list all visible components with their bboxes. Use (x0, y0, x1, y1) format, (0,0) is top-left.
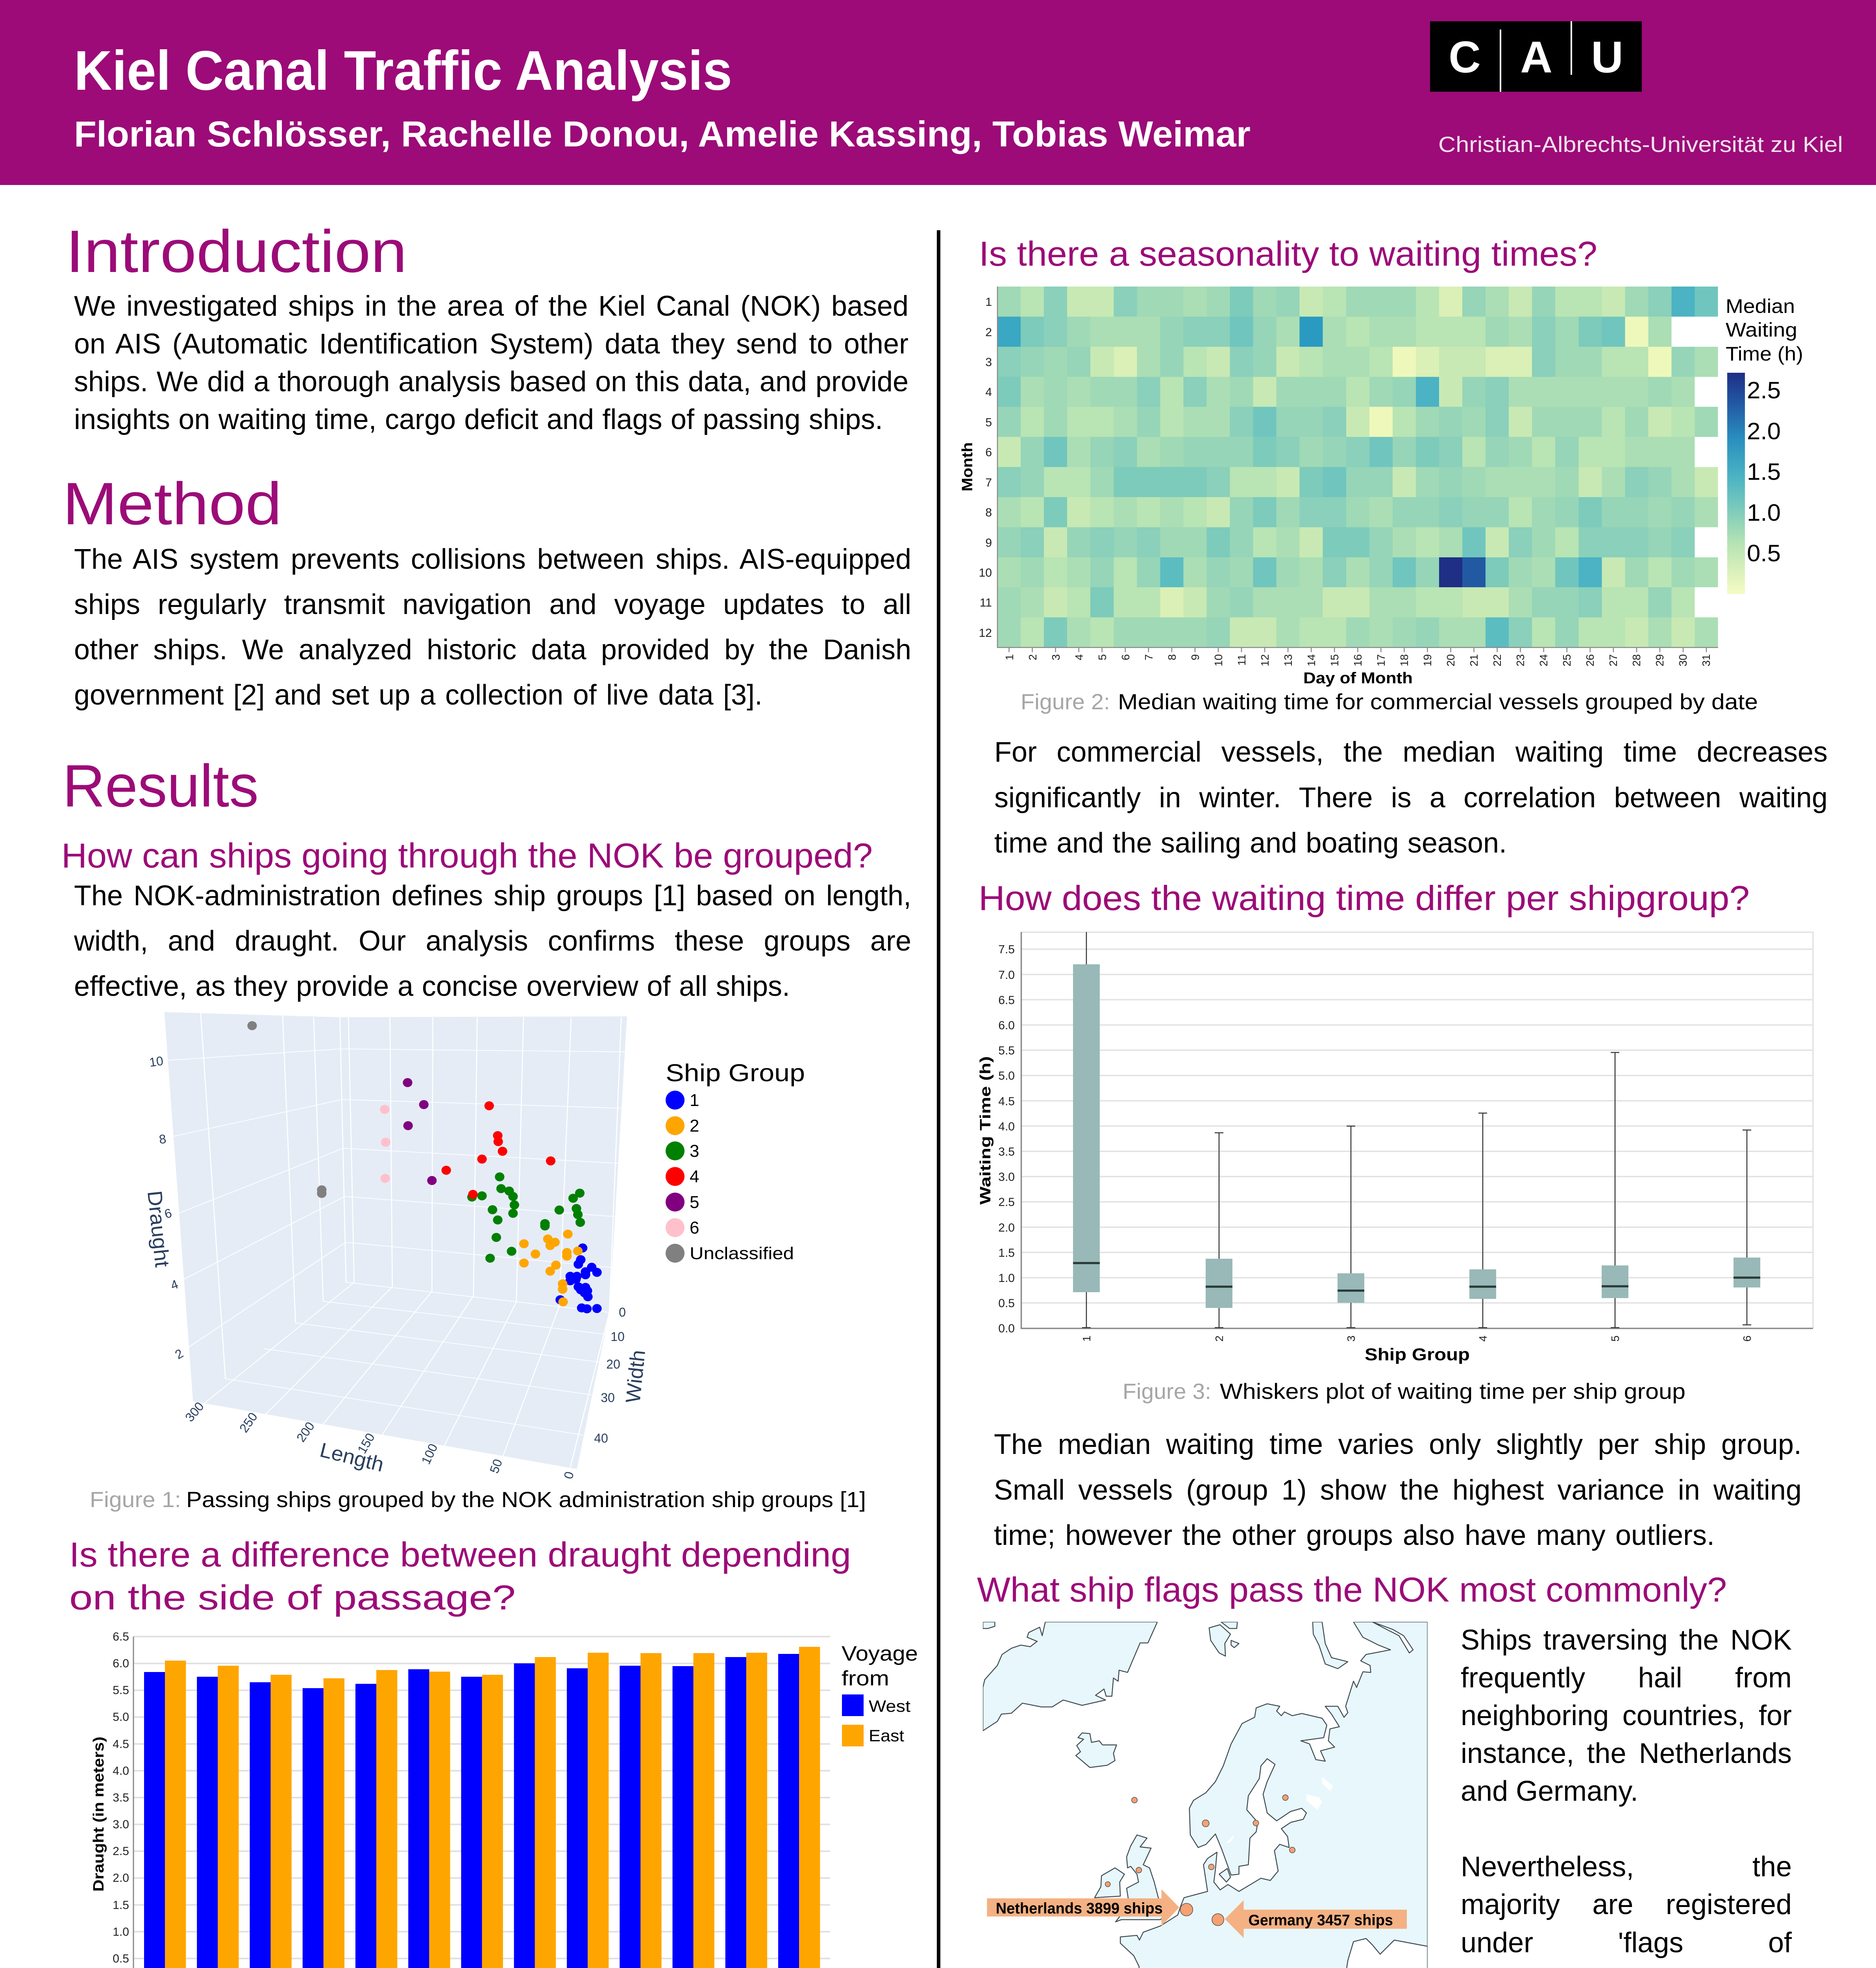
x axis labels (1080, 1335, 1753, 1342)
day labels: 6 (1119, 654, 1132, 660)
axis title: month: Month (959, 442, 976, 491)
day labels: 12 (1259, 654, 1271, 666)
chart: 3D scatter of ship groups (143, 1012, 805, 1480)
CAU logo (1430, 21, 1642, 92)
legend: ship group: Unclassified (690, 1244, 794, 1263)
land: Iceland (1076, 1733, 1117, 1768)
legend: ship group: 5 (690, 1193, 699, 1212)
land: Greenland (983, 1622, 1157, 1731)
y axis labels: 3.5 (113, 1791, 129, 1804)
heading: draught question: Is there a difference between draught depending (69, 1535, 851, 1574)
CAU logo: C (1449, 32, 1481, 82)
legend: voyage from (842, 1642, 918, 1746)
length axis: 150 (355, 1431, 377, 1456)
arrow: Netherlands: Netherlands 3899 ships (996, 1900, 1163, 1917)
y axis labels: 4.5 (998, 1095, 1015, 1108)
text: shipgroup finding (994, 1422, 1802, 1559)
month labels (979, 296, 992, 640)
legend: voyage from: West (869, 1697, 910, 1715)
text: ship grouping: The NOK-administration defines ship groups [1] based on length, (74, 880, 911, 912)
x axis labels: 3 (1345, 1335, 1357, 1342)
caption: figure 1: Passing ships grouped by the NOK administration ship groups [1] (186, 1487, 866, 1512)
month labels: 9 (985, 536, 992, 549)
day labels: 3 (1050, 654, 1062, 660)
width axis: 40 (594, 1431, 608, 1445)
caption: figure 2: Figure 2: (1021, 689, 1110, 714)
day labels (1003, 654, 1712, 666)
text: method (74, 537, 911, 718)
text: flags finding (1461, 1621, 1792, 1968)
month labels: 8 (985, 506, 992, 519)
legend: colour bar: Median (1726, 295, 1795, 317)
legend: ship group: 3 (690, 1141, 699, 1161)
y axis labels: 6.0 (113, 1657, 129, 1670)
axis title: ship group: Ship Group (1365, 1345, 1470, 1364)
heading: shipgroup question: How does the waiting time differ per shipgroup? (979, 879, 1750, 917)
points: group 2 (519, 1230, 583, 1306)
text: flags finding: instance, the Netherlands (1461, 1738, 1792, 1769)
heading: draught question (69, 1535, 851, 1617)
day labels: 26 (1584, 654, 1596, 666)
CAU logo: A (1520, 32, 1552, 82)
text: ship grouping: effective, as they provide a concise overview of all ships. (74, 971, 790, 1002)
whiskers (1082, 932, 1751, 1328)
y axis labels: 5.0 (113, 1711, 129, 1724)
month labels: 10 (979, 566, 992, 579)
draught axis (143, 1054, 186, 1362)
heading: draught question: on the side of passage? (69, 1578, 516, 1617)
y axis labels: 4.5 (113, 1738, 129, 1751)
y axis labels: 0.5 (113, 1952, 129, 1965)
axis title: draught: Draught (in meters) (91, 1737, 107, 1892)
draught axis: 6 (163, 1206, 173, 1221)
land: Sjaelland (1219, 1868, 1230, 1882)
arrow: Netherlands (987, 1889, 1179, 1926)
y axis labels: 2.0 (113, 1872, 129, 1885)
text: flags finding: frequently hail from (1461, 1662, 1792, 1694)
y axis labels: 1.0 (998, 1272, 1015, 1285)
length axis: 200 (294, 1419, 317, 1445)
land: Eurasia (1120, 1622, 1428, 1968)
y axis labels: 3.0 (998, 1171, 1015, 1184)
width axis (594, 1305, 650, 1445)
day labels: 17 (1375, 654, 1387, 666)
points: group 6 (380, 1105, 390, 1183)
text: method: ships regularly transmit navigation and voyage updates to all (74, 589, 911, 620)
caption: figure 3: Figure 3: (1123, 1379, 1211, 1404)
legend: colour bar: Time (h) (1726, 343, 1803, 365)
y axis labels: 6.5 (998, 994, 1015, 1007)
text: shipgroup finding: The median waiting time varies only slightly per ship group. (994, 1429, 1802, 1460)
text: flags finding: majority are registered (1461, 1889, 1792, 1920)
y axis labels: 1.5 (113, 1899, 129, 1912)
day labels: 21 (1468, 654, 1480, 666)
day labels: 31 (1700, 654, 1712, 666)
points: flag states (995, 1795, 1408, 1968)
caption: figure 2: Median waiting time for commercial vessels grouped by date (1118, 689, 1758, 714)
width axis: 10 (611, 1330, 625, 1344)
heading: Results: Results (63, 753, 259, 819)
CAU logo: U (1591, 32, 1623, 82)
y axis labels (998, 943, 1015, 1335)
arrow: Germany (1225, 1900, 1407, 1938)
draught axis: 10 (148, 1054, 164, 1069)
points: group 3 (467, 1173, 585, 1263)
land: Svalbard (1209, 1622, 1239, 1656)
sea: Kara sliver (1372, 1622, 1413, 1653)
heading: flags question: What ship flags pass the NOK most commonly? (977, 1570, 1727, 1609)
legend: ship group (666, 1060, 805, 1263)
day labels: 10 (1212, 654, 1225, 666)
bars: west (144, 1654, 799, 1968)
heading: Method: Method (63, 470, 282, 537)
chart: mean draught bars (91, 1630, 918, 1968)
day labels: 8 (1166, 654, 1178, 660)
text: flags finding: neighboring countries, for (1461, 1700, 1792, 1731)
text: flags finding: Ships traversing the NOK (1461, 1624, 1792, 1656)
y axis labels: 3.0 (113, 1818, 129, 1831)
text: introduction: ships. We did a thorough analysis based on this data, and provide (74, 366, 908, 398)
legend: voyage from: from (842, 1667, 889, 1690)
legend: colour bar: 0.5 (1747, 540, 1781, 566)
text: shipgroup finding: time; however the other groups also have many outliers. (994, 1520, 1715, 1551)
legend: ship group: 2 (690, 1116, 699, 1136)
chart: waiting time box plot (977, 932, 1813, 1364)
day labels: 23 (1514, 654, 1526, 666)
day labels: 4 (1073, 654, 1085, 660)
y axis labels: 0.5 (998, 1297, 1015, 1310)
day labels: 27 (1607, 654, 1619, 666)
legend: voyage from: East (869, 1726, 904, 1745)
heading: seasonality question: Is there a seasonality to waiting times? (979, 234, 1597, 273)
month labels: 3 (985, 356, 992, 369)
text: introduction: on AIS (Automatic Identification System) data they send to other (74, 328, 908, 360)
day labels: 13 (1282, 654, 1294, 666)
text: introduction: insights on waiting time, cargo deficit and flags of passing ships. (74, 404, 883, 435)
points: group 1 (555, 1243, 602, 1313)
y axis labels: 5.0 (998, 1069, 1015, 1082)
day labels: 7 (1143, 654, 1155, 660)
legend: colour bar: 1.5 (1747, 459, 1781, 485)
day labels: 22 (1491, 654, 1503, 666)
caption: figure 3: Whiskers plot of waiting time per ship group (1220, 1379, 1685, 1404)
text: ship grouping (74, 873, 911, 1009)
heading: ship grouping question: How can ships going through the NOK be grouped? (61, 836, 873, 875)
length axis (182, 1399, 577, 1480)
legend: colour bar: 1.0 (1747, 499, 1781, 526)
land: Novaya Zemlya (1313, 1622, 1348, 1668)
text: seasonality finding (994, 730, 1828, 866)
day labels: 25 (1561, 654, 1573, 666)
authors: Florian Schlösser, Rachelle Donou, Amelie Kassing, Tobias Weimar (74, 114, 1251, 154)
legend: ship group: 4 (690, 1167, 699, 1186)
text: flags finding: under 'flags of (1461, 1927, 1792, 1959)
day labels: 20 (1445, 654, 1457, 666)
day labels: 28 (1630, 654, 1643, 666)
length axis: 0 (561, 1470, 577, 1480)
width axis: Width (622, 1349, 650, 1404)
length axis: 100 (418, 1441, 440, 1467)
length axis: 300 (182, 1399, 207, 1424)
y axis labels: 2.0 (998, 1221, 1015, 1234)
title: Kiel Canal Traffic Analysis (74, 39, 732, 102)
draught axis: 8 (158, 1132, 167, 1147)
map: flags across Europe (983, 1622, 1428, 1968)
day labels: 29 (1654, 654, 1666, 666)
bars: east (165, 1647, 820, 1968)
length axis: Length (318, 1439, 386, 1476)
text: flags finding: Nevertheless, the (1461, 1851, 1792, 1883)
draught axis: 2 (172, 1346, 186, 1362)
medians (1073, 1263, 1760, 1291)
legend: voyage from: Voyage (842, 1642, 918, 1665)
draught axis: Draught (143, 1189, 174, 1269)
legend: colour bar (1726, 295, 1803, 594)
x axis labels: 1 (1080, 1335, 1093, 1342)
caption: figure 1: Figure 1: (90, 1487, 181, 1512)
day labels: 5 (1096, 654, 1108, 660)
x axis labels: 4 (1477, 1335, 1489, 1342)
points: unclassified (247, 1021, 327, 1198)
x axis labels: 2 (1213, 1335, 1225, 1342)
text: method: The AIS system prevents collisions between ships. AIS-equipped (74, 544, 911, 575)
y axis labels: 7.5 (998, 943, 1015, 956)
text: seasonality finding: significantly in winter. There is a correlation between waiting (994, 782, 1828, 813)
y axis labels: 7.0 (998, 969, 1015, 982)
x axis labels: 6 (1741, 1335, 1753, 1342)
land: Ireland (1095, 1868, 1125, 1898)
y axis labels: 1.5 (998, 1247, 1015, 1260)
day labels: 15 (1328, 654, 1341, 666)
length axis: 50 (487, 1457, 505, 1475)
month labels: 2 (985, 326, 992, 339)
legend: ship group: 1 (690, 1091, 699, 1110)
legend: colour bar: Waiting (1726, 319, 1797, 341)
length axis: 250 (237, 1410, 260, 1435)
month labels: 11 (980, 596, 992, 609)
month labels: 6 (985, 446, 992, 459)
day labels: 11 (1236, 654, 1248, 666)
y axis labels: 3.5 (998, 1145, 1015, 1158)
header band (0, 0, 1876, 185)
axis title: day of month: Day of Month (1303, 670, 1413, 687)
lakes (1227, 1777, 1333, 1843)
legend: ship group: Ship Group (666, 1060, 805, 1087)
text: shipgroup finding: Small vessels (group 1) show the highest variance in waiting (994, 1474, 1802, 1506)
heading: Introduction: Introduction (66, 218, 407, 285)
y axis labels: 0.0 (998, 1322, 1015, 1335)
day labels: 18 (1398, 654, 1410, 666)
draught axis: 4 (168, 1277, 180, 1293)
points: group 5 (403, 1078, 437, 1185)
month labels: 5 (985, 416, 992, 429)
x axis labels: 5 (1609, 1335, 1621, 1342)
day labels: 19 (1421, 654, 1434, 666)
y axis labels (113, 1630, 129, 1968)
points: group 4 (442, 1101, 555, 1199)
y axis labels: 4.0 (113, 1765, 129, 1777)
legend: colour bar: 2.5 (1747, 377, 1781, 403)
y axis labels: 5.5 (113, 1684, 129, 1697)
day labels: 1 (1003, 654, 1016, 660)
day labels: 16 (1352, 654, 1364, 666)
text: ship grouping: width, and draught. Our analysis confirms these groups are (74, 925, 911, 957)
y axis labels: 2.5 (998, 1196, 1015, 1209)
text: method: other ships. We analyzed historic data provided by the Danish (74, 634, 911, 666)
university name: Christian-Albrechts-Universität zu Kiel (1438, 132, 1843, 157)
day labels: 30 (1677, 654, 1689, 666)
month labels: 1 (985, 296, 992, 309)
text: seasonality finding: time and the sailing and boating season. (994, 827, 1507, 859)
month labels: 4 (985, 386, 992, 399)
width axis: 30 (601, 1391, 615, 1405)
legend: colour bar: 2.0 (1747, 418, 1781, 444)
y axis labels: 6.0 (998, 1019, 1015, 1032)
y axis labels: 5.5 (998, 1044, 1015, 1057)
text: flags finding: and Germany. (1461, 1776, 1638, 1807)
width axis: 0 (619, 1305, 626, 1319)
width axis: 20 (606, 1357, 620, 1371)
month labels: 7 (985, 476, 992, 489)
text: seasonality finding: For commercial vessels, the median waiting time decreases (994, 736, 1828, 768)
y axis labels: 6.5 (113, 1630, 129, 1643)
day labels: 2 (1027, 654, 1039, 660)
text: introduction: We investigated ships in the area of the Kiel Canal (NOK) based (74, 290, 908, 322)
text: introduction (74, 287, 908, 438)
day labels: 9 (1189, 654, 1201, 660)
legend: ship group: 6 (690, 1218, 699, 1237)
text: method: government [2] and set up a collection of live data [3]. (74, 679, 762, 711)
y axis labels: 2.5 (113, 1845, 129, 1858)
day labels: 24 (1537, 654, 1550, 666)
arrow: Germany: Germany 3457 ships (1248, 1912, 1393, 1929)
column divider (937, 230, 940, 1968)
chart: waiting time heatmap (959, 287, 1803, 687)
axis title: waiting time: Waiting Time (h) (977, 1056, 994, 1204)
boxes (1073, 964, 1760, 1308)
day labels: 14 (1305, 654, 1317, 666)
month labels: 12 (979, 627, 992, 640)
sea: Black Sea (1344, 1938, 1428, 1968)
y axis labels: 4.0 (998, 1120, 1015, 1133)
y axis labels: 1.0 (113, 1925, 129, 1938)
land: Britain (1116, 1835, 1164, 1922)
